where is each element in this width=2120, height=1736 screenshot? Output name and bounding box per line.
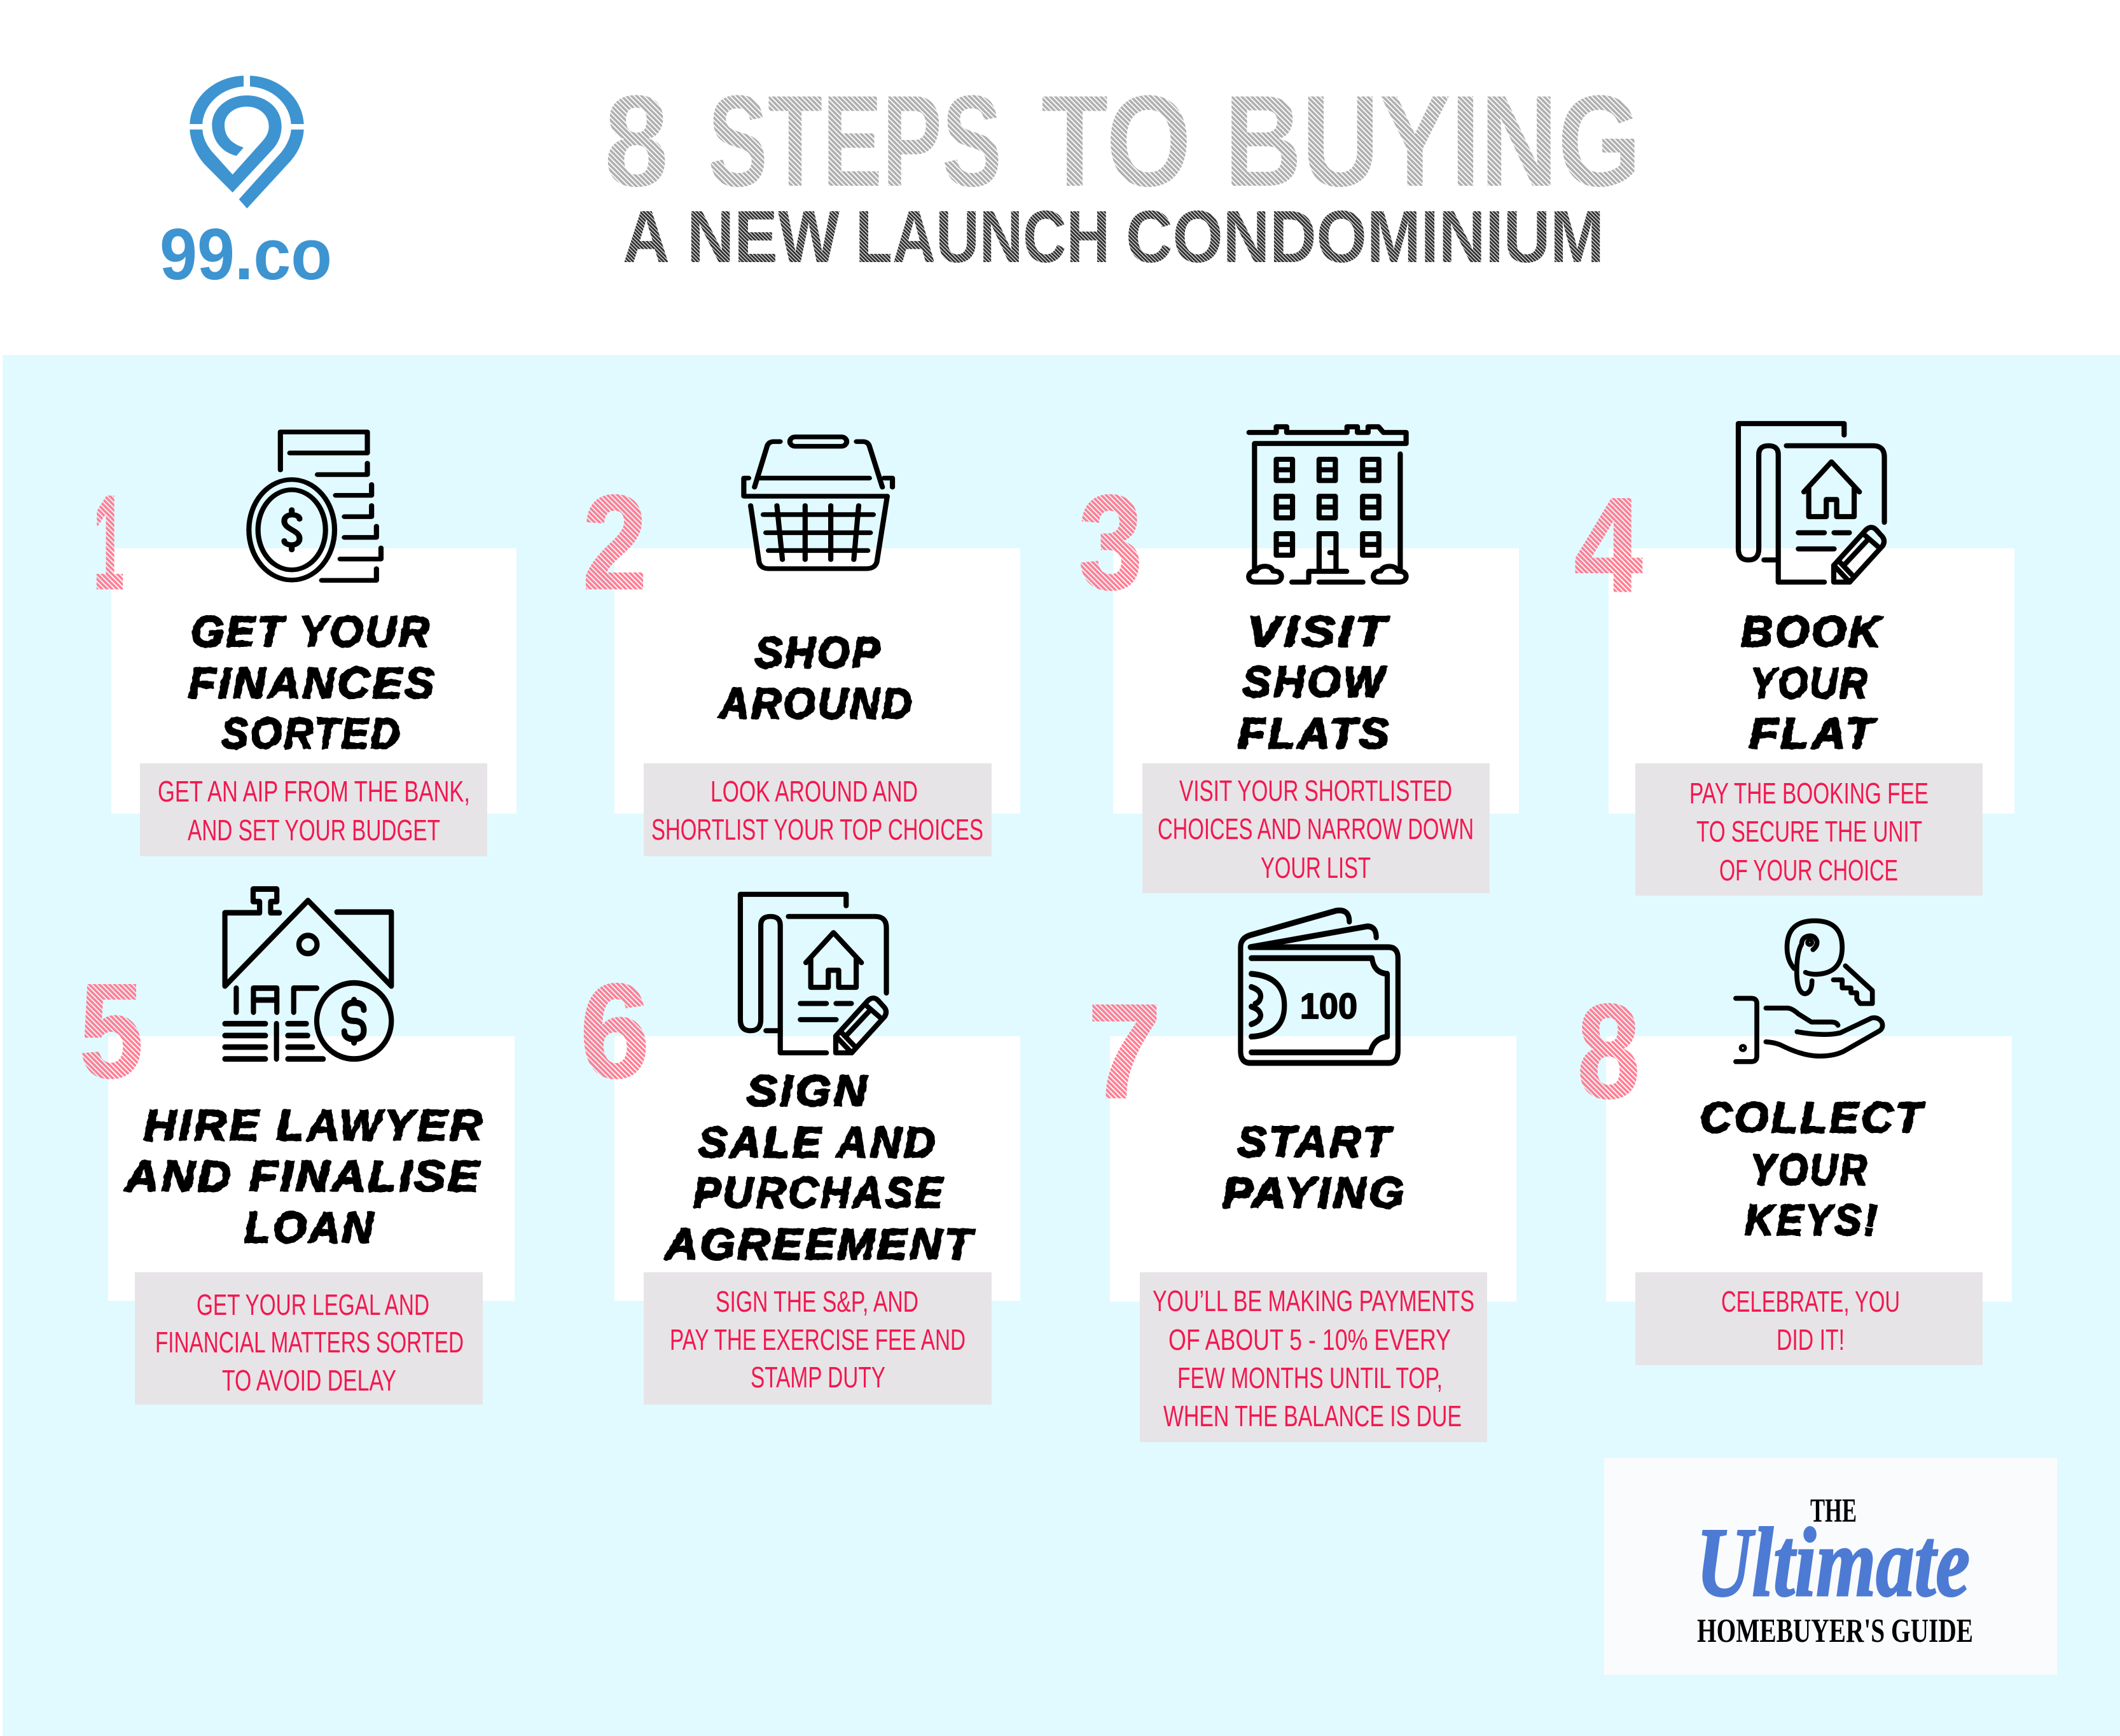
step 6 heading: AGREEMENT <box>664 1220 976 1268</box>
subtitle: LAUNCH <box>856 195 1110 278</box>
icon: location pin <box>190 76 304 209</box>
step 2 description box <box>644 763 992 856</box>
step 6 description: PAY THE EXERCISE FEE AND <box>670 1323 966 1356</box>
title: BUYING <box>1224 69 1641 214</box>
step 6 description: STAMP DUTY <box>751 1361 885 1394</box>
step 4 description: OF YOUR CHOICE <box>1719 854 1898 887</box>
step 7 description box <box>1140 1272 1487 1442</box>
badge text: homebuyer's guide: HOMEBUYER'S GUIDE <box>1697 1613 1973 1649</box>
step 4 description box <box>1635 763 1983 896</box>
icon: banknotes: 100 <box>1300 987 1357 1027</box>
step 8 heading <box>1700 1094 1925 1244</box>
step 4 card <box>1609 548 2014 814</box>
panel: the ultimate homebuyer's guide badge <box>1604 1458 2057 1675</box>
logo wordmark: 99.co <box>160 214 332 295</box>
step 3 description: VISIT YOUR SHORTLISTED <box>1179 774 1452 807</box>
step 2 description: LOOK AROUND AND <box>710 775 918 808</box>
step 5 heading: AND FINALISE <box>124 1152 482 1200</box>
title: 8 <box>604 69 669 214</box>
icon: shopping basket <box>744 437 892 569</box>
step 7 number: 7 <box>1088 976 1161 1126</box>
step 5 card <box>108 1036 515 1301</box>
step 1 description box <box>140 763 487 856</box>
step 6 number: 6 <box>580 956 649 1106</box>
step 1 heading: SORTED <box>221 709 402 758</box>
icon: hand receiving keys <box>1736 920 1883 1062</box>
step 5 heading: HIRE LAWYER <box>144 1101 485 1149</box>
step 5 heading: LOAN <box>244 1204 376 1252</box>
step 5 number: 5 <box>80 956 143 1106</box>
step 8 card <box>1606 1036 2012 1302</box>
step 1 description: GET AN AIP FROM THE BANK, <box>158 775 470 808</box>
step 6 description <box>670 1285 966 1394</box>
step 2 description <box>651 775 983 846</box>
step 7 card <box>1110 1036 1516 1302</box>
step 2 number: 2 <box>583 468 647 617</box>
step 2 heading <box>718 628 914 728</box>
step 5 heading <box>124 1101 485 1252</box>
step 5 description <box>155 1288 464 1397</box>
step 3 card <box>1113 548 1519 814</box>
step 4 description <box>1689 777 1929 887</box>
step 5 description: TO AVOID DELAY <box>222 1364 396 1397</box>
badge background <box>1604 1458 2057 1675</box>
step 3 heading: FLATS <box>1238 709 1392 758</box>
step 3 description: YOUR LIST <box>1261 851 1371 884</box>
step 1 heading <box>188 608 437 758</box>
panel: step 5 <box>80 889 515 1405</box>
badge text: ultimate: Ultimate <box>1696 1508 1970 1617</box>
step 3 heading: VISIT <box>1247 608 1390 656</box>
step 7 description <box>1153 1284 1474 1433</box>
step 7 description: WHEN THE BALANCE IS DUE <box>1163 1399 1462 1433</box>
step 6 description: SIGN THE S&P, AND <box>716 1285 918 1318</box>
step 3 description box <box>1142 763 1490 893</box>
panel: step 8 <box>1577 920 2012 1365</box>
step 7 heading <box>1223 1118 1407 1217</box>
step 7 heading: START <box>1237 1118 1393 1166</box>
step 8 description box <box>1635 1272 1983 1365</box>
step 5 description: GET YOUR LEGAL AND <box>197 1288 429 1321</box>
step 3 description <box>1158 774 1474 884</box>
step 2 heading: AROUND <box>718 679 914 728</box>
subtitle <box>623 195 1604 278</box>
step 8 description <box>1721 1285 1900 1356</box>
step 6 description box <box>644 1272 992 1405</box>
title <box>604 69 1641 214</box>
step 3 heading <box>1238 608 1392 758</box>
icon: banknotes <box>1240 910 1398 1063</box>
icon: house and coin <box>225 889 391 1059</box>
subtitle: A <box>623 195 670 278</box>
step 2 heading: SHOP <box>755 628 882 677</box>
step 8 description: CELEBRATE, YOU <box>1721 1285 1900 1318</box>
icon: house document and pencil <box>1738 424 1885 582</box>
step 8 number: 8 <box>1577 976 1640 1126</box>
step 2 description: SHORTLIST YOUR TOP CHOICES <box>651 813 983 846</box>
step 7 heading: PAYING <box>1223 1169 1407 1217</box>
step 7 description: YOU’LL BE MAKING PAYMENTS <box>1153 1284 1474 1317</box>
step 6 heading: PURCHASE <box>693 1169 945 1217</box>
step 1 heading: GET YOUR <box>191 608 432 656</box>
panel: step 2 <box>583 437 1020 856</box>
panel: step 1 <box>94 432 516 856</box>
step 6 card <box>614 1036 1020 1301</box>
icon: coin and bills <box>249 432 381 580</box>
panel: step 1: 1 <box>94 468 124 617</box>
badge text: the: THE <box>1810 1492 1857 1529</box>
step 5 description: FINANCIAL MATTERS SORTED <box>155 1326 464 1359</box>
step 4 description: TO SECURE THE UNIT <box>1696 815 1922 848</box>
step 4 heading: BOOK <box>1741 608 1883 656</box>
step 1 description: AND SET YOUR BUDGET <box>188 814 440 847</box>
panel: step 6 <box>580 894 1020 1405</box>
step 5 description box <box>135 1272 483 1405</box>
panel: step 3 <box>1079 427 1519 893</box>
step 2 card <box>614 548 1020 814</box>
step 6 heading: SALE AND <box>698 1118 938 1167</box>
background panel <box>3 355 2120 1736</box>
step 6 heading: SIGN <box>747 1067 869 1115</box>
step 1 heading: FINANCES <box>188 659 437 707</box>
panel: step 4 <box>1574 424 2014 896</box>
panel: step 7 <box>1088 910 1516 1442</box>
title: TO <box>1041 69 1191 214</box>
step 7 description: FEW MONTHS UNTIL TOP, <box>1177 1361 1443 1394</box>
step 3 heading: SHOW <box>1242 658 1388 706</box>
subtitle: NEW <box>687 195 840 278</box>
step 7 description: OF ABOUT 5 - 10% EVERY <box>1168 1323 1451 1356</box>
icon: apartment building <box>1249 427 1406 582</box>
logo: 99.co <box>160 76 332 295</box>
step 1 card <box>111 548 516 814</box>
step 8 description: DID IT! <box>1777 1323 1845 1356</box>
step 4 heading: YOUR <box>1750 659 1869 707</box>
step 4 description: PAY THE BOOKING FEE <box>1689 777 1929 810</box>
step 6 heading <box>664 1067 976 1268</box>
step 8 heading: KEYS! <box>1745 1196 1880 1244</box>
step 3 number: 3 <box>1079 468 1142 617</box>
step 4 heading: FLAT <box>1749 709 1878 758</box>
step 8 heading: COLLECT <box>1700 1094 1925 1142</box>
title: STEPS <box>708 69 1002 214</box>
step 4 number: 4 <box>1574 470 1642 620</box>
step 4 heading <box>1741 608 1883 758</box>
step 1 description <box>158 775 470 847</box>
step 3 description: CHOICES AND NARROW DOWN <box>1158 812 1474 845</box>
step 8 heading: YOUR <box>1750 1146 1869 1194</box>
subtitle: CONDOMINIUM <box>1126 195 1604 278</box>
icon: sale agreement document and pencil <box>740 894 887 1053</box>
